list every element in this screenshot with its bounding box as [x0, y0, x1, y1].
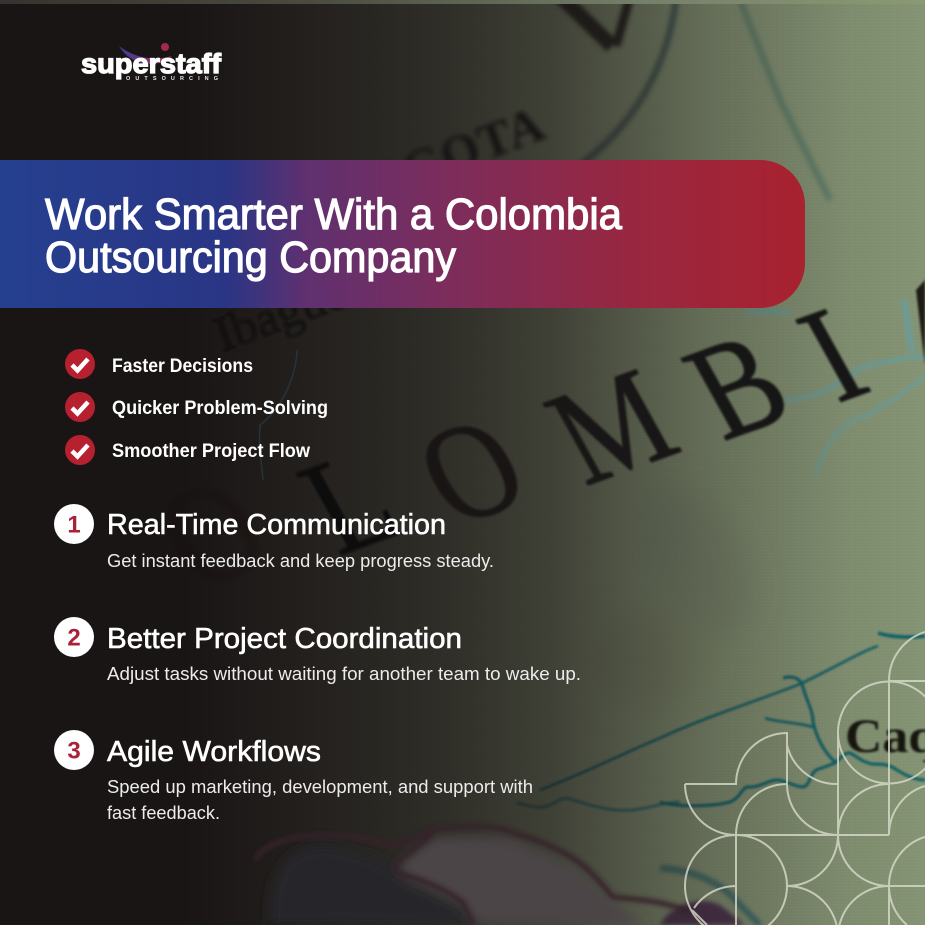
geometric line pattern	[685, 632, 925, 925]
heading 2: Better Project Coordination	[107, 623, 462, 655]
step 2: Better Project Coordination	[54, 617, 581, 684]
logo tagline: OUTSOURCING	[126, 76, 218, 82]
heading 3: Agile Workflows	[107, 736, 321, 768]
step 1: Real-Time Communication	[54, 504, 494, 571]
title banner	[0, 160, 805, 308]
lower land outline	[255, 826, 690, 925]
map lettering: OMBI	[393, 280, 889, 554]
check item: Faster Decisions: Faster Decisions	[112, 356, 253, 377]
number badge 3	[54, 730, 94, 770]
description 3: fast feedback.	[107, 803, 220, 823]
title text: Outsourcing Company	[45, 233, 456, 282]
upper river bands	[580, 0, 830, 200]
map lettering: Ibague: Ibagué	[207, 263, 354, 362]
thin river	[259, 350, 297, 480]
map mottling	[590, 468, 775, 710]
number badge 1: 1	[67, 512, 81, 538]
map lettering: right fragment	[916, 280, 925, 365]
map lettering: first O: O	[134, 451, 291, 617]
top strip	[0, 0, 925, 4]
lower rivers	[660, 868, 760, 925]
number badge 1	[54, 504, 94, 544]
logo: superstaff outsourcing	[81, 43, 222, 82]
purple land patch	[660, 901, 745, 925]
check item: Smoother Project Flow: Smoother Project Flow	[112, 441, 310, 462]
description 2: Adjust tasks without waiting for another team to wake up.	[107, 664, 581, 684]
map lettering: Bogota: BOGOTA	[325, 95, 552, 223]
lower land: pale	[400, 836, 645, 925]
description 1: Get instant feedback and keep progress steady.	[107, 551, 494, 571]
map lettering: L: L	[277, 421, 422, 583]
logo wordmark: superstaff	[81, 48, 222, 79]
description 3	[107, 777, 533, 823]
step 3: Agile Workflows	[54, 730, 533, 823]
map lettering: OMBI: M	[524, 340, 700, 513]
check item: Smoother Project Flow	[65, 435, 310, 465]
river lines	[517, 633, 925, 810]
title text: Work Smarter With a Colombia	[45, 190, 623, 239]
heading 1: Real-Time Communication	[107, 509, 446, 541]
lower land: blue-grey	[270, 845, 475, 925]
title text	[45, 190, 623, 282]
map lettering: OMBI: I	[776, 280, 889, 430]
right river bands	[745, 300, 925, 476]
check item: Faster Decisions	[65, 349, 253, 379]
map lettering: OMBI: B	[662, 304, 813, 468]
description 3: Speed up marketing, development, and support with	[107, 777, 533, 797]
map lettering: OMBI: O	[393, 388, 550, 554]
check item: Quicker Problem-Solving	[65, 392, 328, 422]
logo swoosh	[119, 43, 172, 64]
number badge 2	[54, 617, 94, 657]
check item: Quicker Problem-Solving: Quicker Problem-Solving	[112, 398, 328, 419]
number badge 3: 3	[67, 738, 81, 764]
map lettering: top fragment	[560, 0, 630, 46]
checklist	[65, 349, 328, 465]
dim map details in dark area	[134, 263, 690, 925]
number badge 2: 2	[67, 624, 81, 652]
